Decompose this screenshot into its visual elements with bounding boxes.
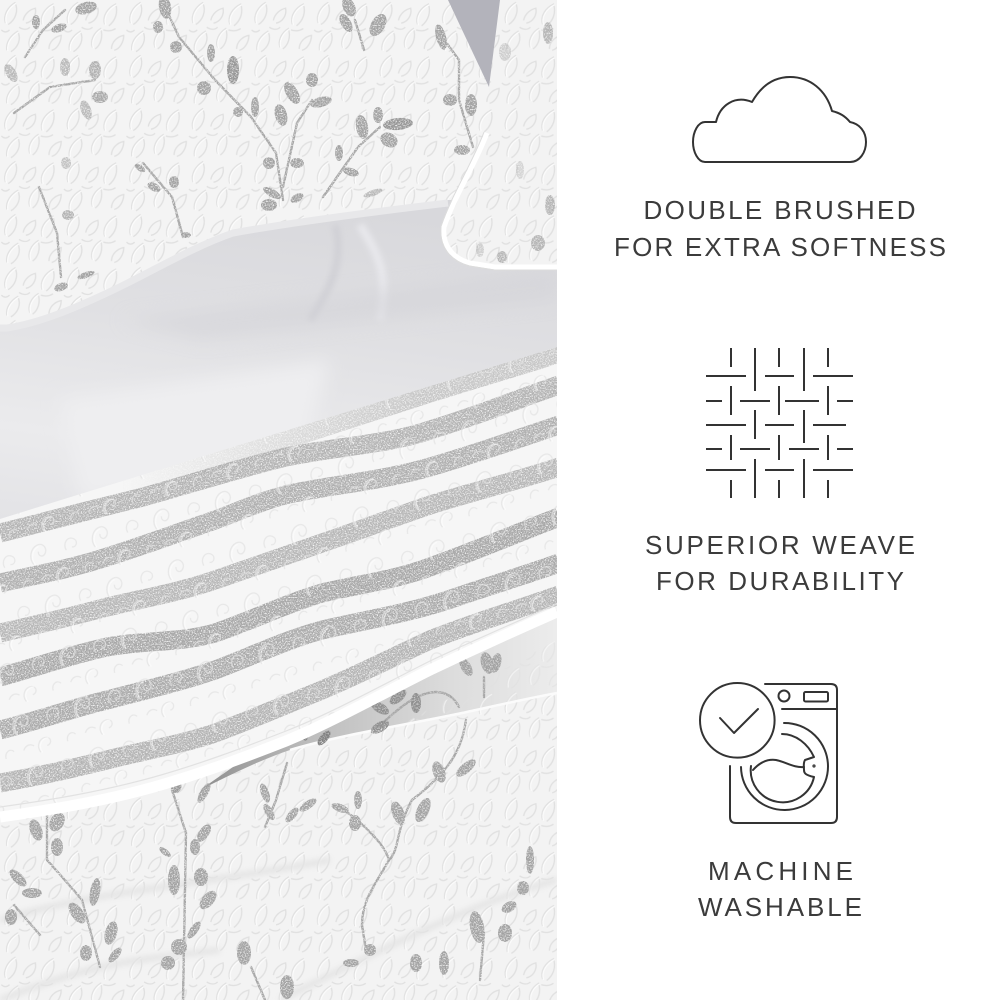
sprigs on right pillow — [476, 22, 555, 263]
striped quilt — [0, 340, 559, 820]
shaded area under stripes — [200, 605, 557, 790]
quilted texture — [0, 340, 557, 820]
shadow gap behind pillows — [448, 0, 500, 87]
heading: machine washable — [698, 856, 862, 922]
sprigs on quilt — [5, 651, 534, 1000]
lower quilt — [0, 605, 557, 1000]
heading: double brushed: DOUBLE BRUSHED — [644, 195, 916, 225]
fitted sheet — [0, 200, 557, 519]
right pillow — [441, 0, 557, 270]
icon: cloud — [693, 77, 866, 162]
heading: double brushed: FOR EXTRA SOFTNESS — [614, 232, 946, 262]
quilt folds — [0, 860, 557, 1000]
sprigs on pillow — [2, 0, 477, 293]
heading: double brushed — [614, 195, 946, 262]
heading: superior weave: FOR DURABILITY — [656, 566, 904, 596]
heading: machine washable: MACHINE — [708, 856, 853, 886]
grey stripes — [0, 353, 559, 783]
piping — [0, 612, 557, 817]
panel: bedding photo — [0, 0, 559, 1000]
icon: washing machine — [700, 683, 837, 823]
icon: weave — [706, 348, 853, 498]
heading: superior weave: SUPERIOR WEAVE — [645, 530, 915, 560]
heading: superior weave — [645, 530, 915, 596]
left pillow — [0, 0, 489, 328]
heading: machine washable: WASHABLE — [698, 892, 862, 922]
